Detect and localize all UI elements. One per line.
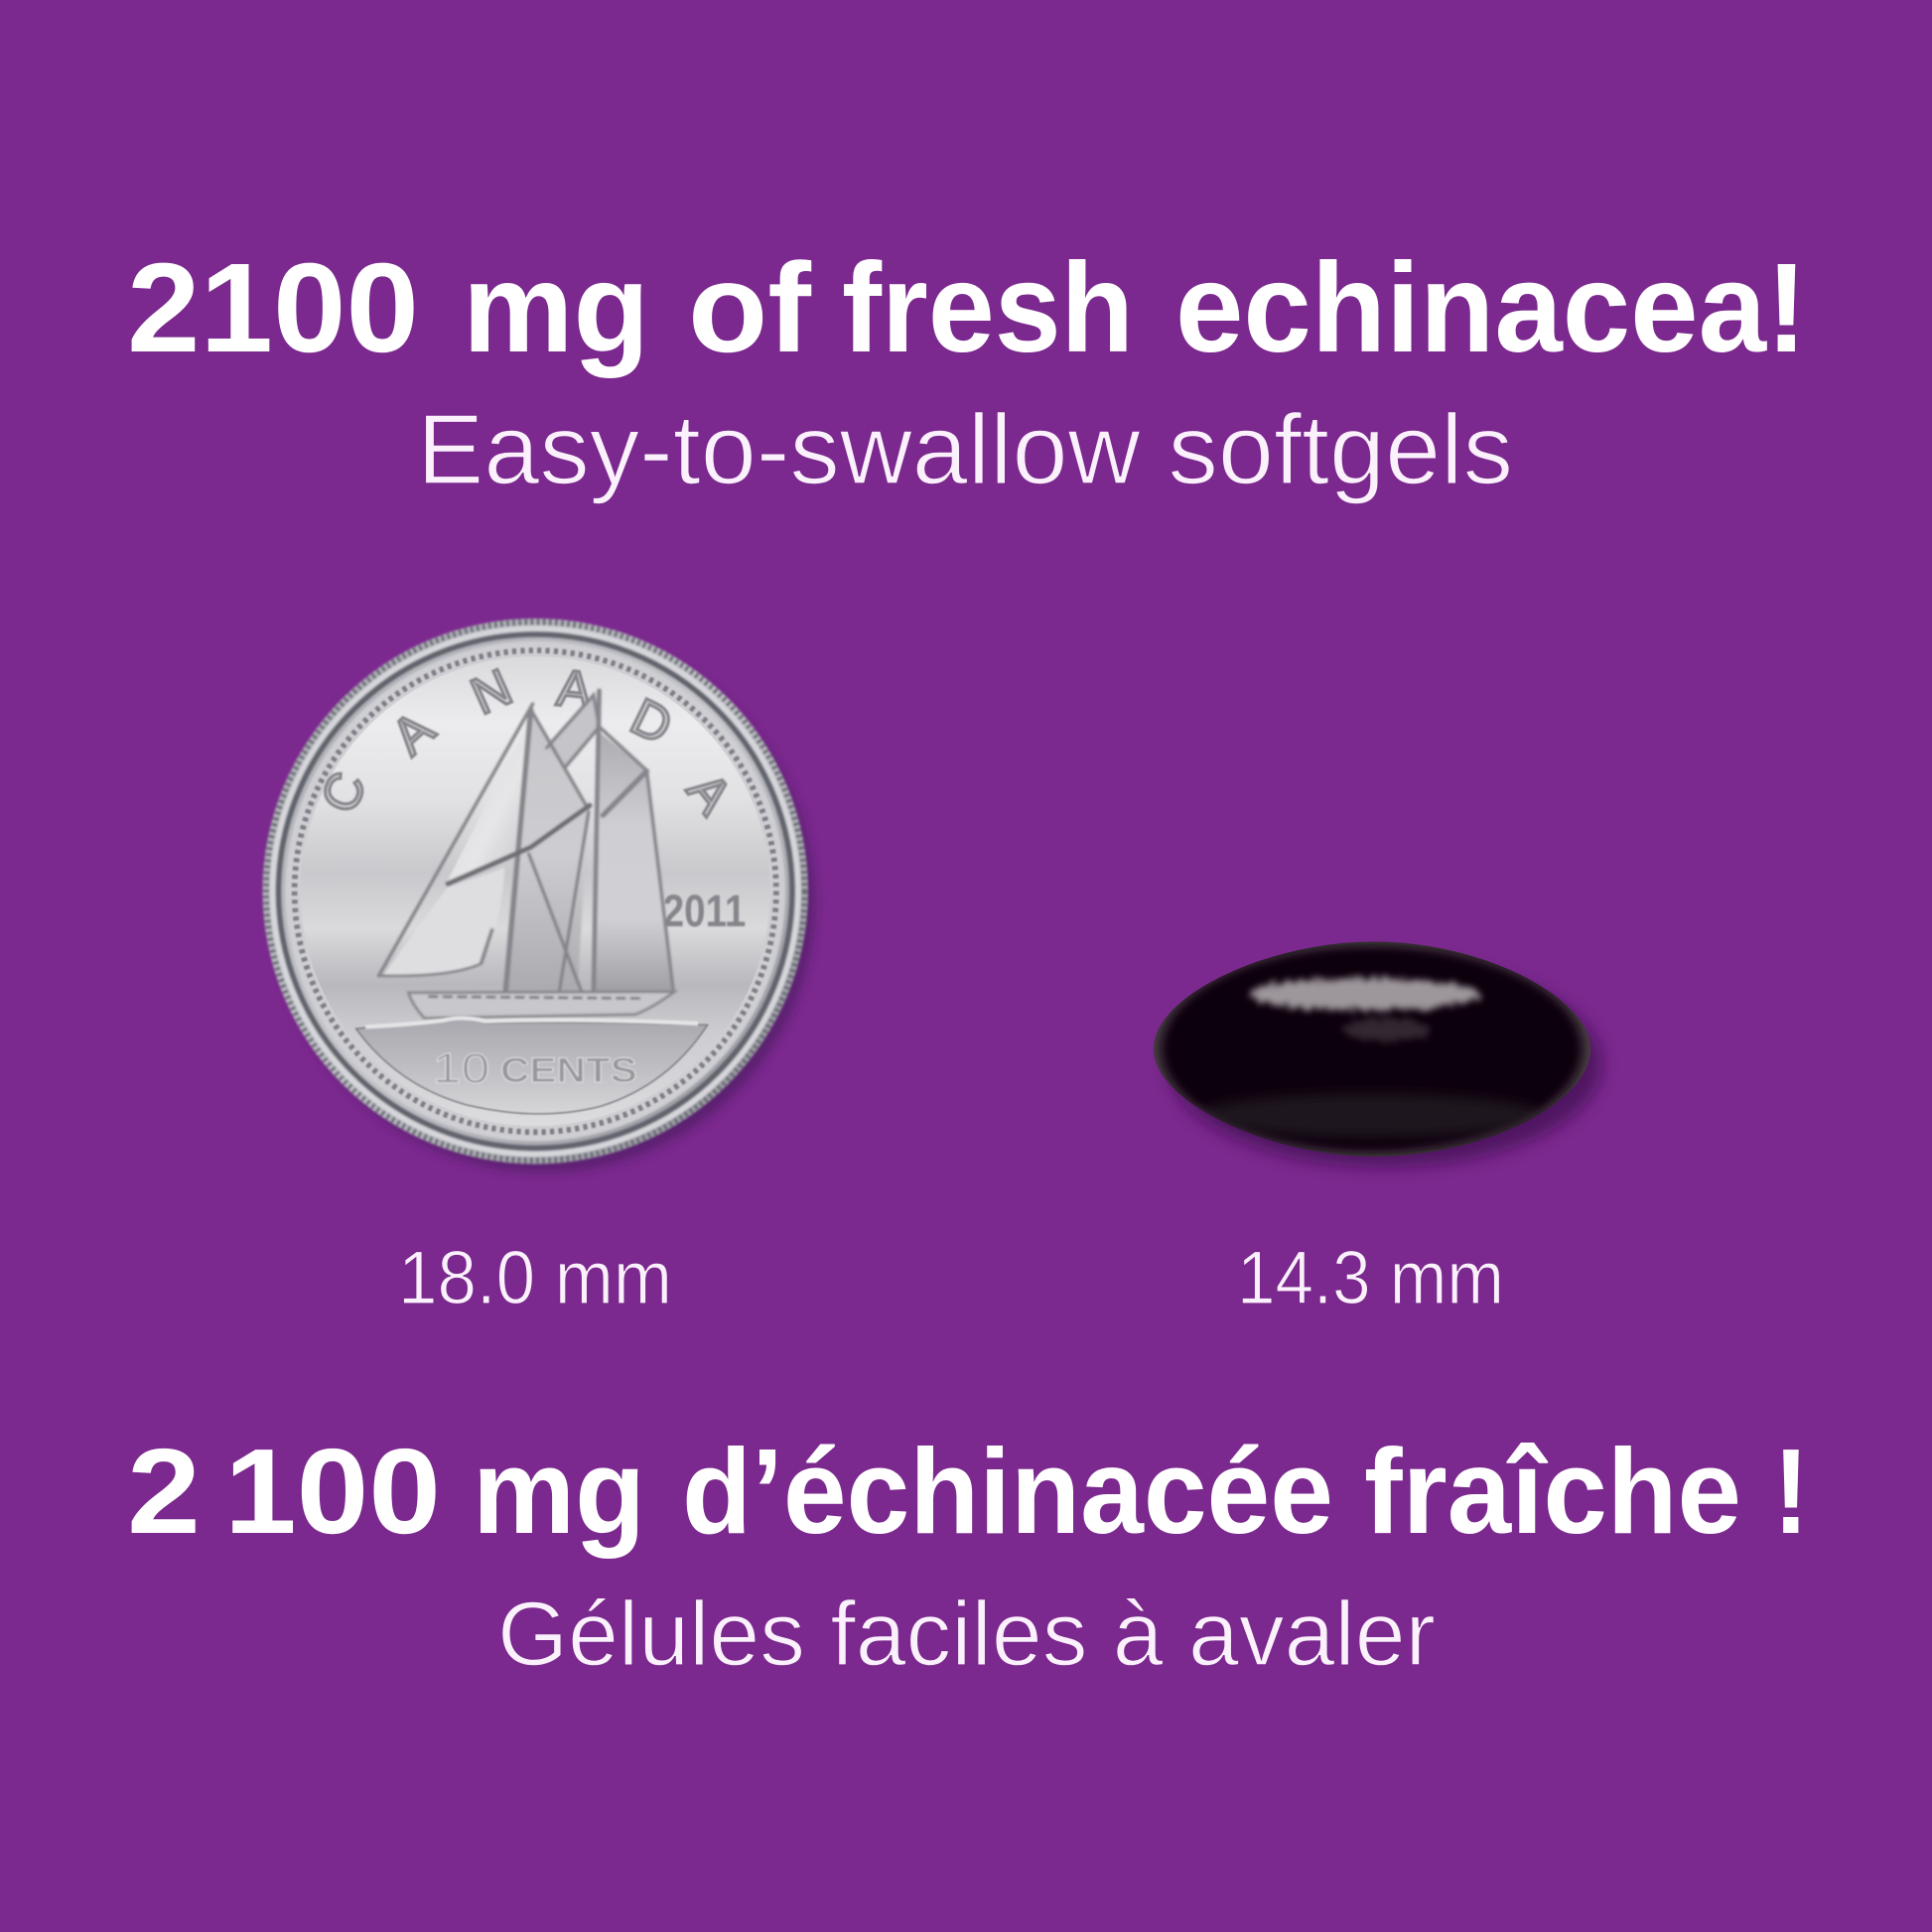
coin bead ring	[295, 650, 776, 1132]
heading: French: 100	[224, 1424, 441, 1559]
softgel shadow	[1169, 961, 1601, 1168]
water and denomination panel	[356, 1018, 708, 1114]
coin size label: 18.0 mm	[398, 1236, 672, 1320]
lettering: CANADA: A	[676, 762, 743, 825]
lower jib sail	[383, 868, 505, 975]
coin: Canadian dime	[262, 619, 814, 1172]
date: 2011: 2011	[663, 886, 746, 936]
hull	[408, 992, 674, 1019]
heading: French: mg	[473, 1424, 645, 1559]
topsail	[547, 695, 600, 767]
heading: English: mg	[463, 237, 649, 379]
deck rail	[428, 997, 641, 999]
lettering: CANADA: A	[381, 700, 446, 766]
softgel lower reflection	[1198, 1094, 1542, 1137]
heading: French: !	[1773, 1424, 1809, 1559]
schooner	[379, 691, 674, 1019]
foresail	[504, 710, 588, 999]
heading: English: echinacea!	[1175, 237, 1807, 379]
lettering: CANADA: D	[622, 688, 681, 756]
heading: English: fresh	[842, 237, 1134, 379]
denomination: 10 cents: 10	[433, 1045, 489, 1093]
heading: French: fraîche	[1364, 1424, 1741, 1559]
lettering: CANADA: C	[311, 764, 378, 821]
softgel body	[1154, 941, 1590, 1157]
heading: English: of	[688, 237, 811, 379]
heading: French	[127, 1424, 1809, 1559]
softgel size label: 14.3 mm	[1237, 1236, 1504, 1320]
upper jib sail	[447, 721, 530, 883]
coin shadow	[274, 631, 814, 1172]
softgel capsule	[1154, 941, 1601, 1168]
heading: English	[127, 237, 1807, 379]
softgel highlight	[1248, 979, 1479, 1011]
heading: English: 2100	[127, 237, 419, 379]
infographic canvas	[131, 259, 1799, 1666]
subheading: French: Gélules faciles à avaler	[497, 1584, 1436, 1685]
coin field	[301, 656, 770, 1126]
denomination: 10 cents	[433, 1045, 637, 1093]
denomination: 10 cents: CENTS	[500, 1051, 637, 1090]
lettering: CANADA: A	[554, 659, 595, 721]
rigging and masts	[379, 691, 673, 1001]
softgel faint speckle	[1343, 1018, 1430, 1040]
lettering: CANADA	[311, 658, 743, 825]
lettering: CANADA: N	[463, 658, 520, 726]
heading: French: 2	[127, 1424, 201, 1559]
coin outer rim	[262, 619, 808, 1164]
subheading: English: Easy-to-swallow softgels	[417, 394, 1513, 505]
mainsail	[595, 733, 673, 999]
heading: French: d’échinacée	[682, 1424, 1333, 1559]
